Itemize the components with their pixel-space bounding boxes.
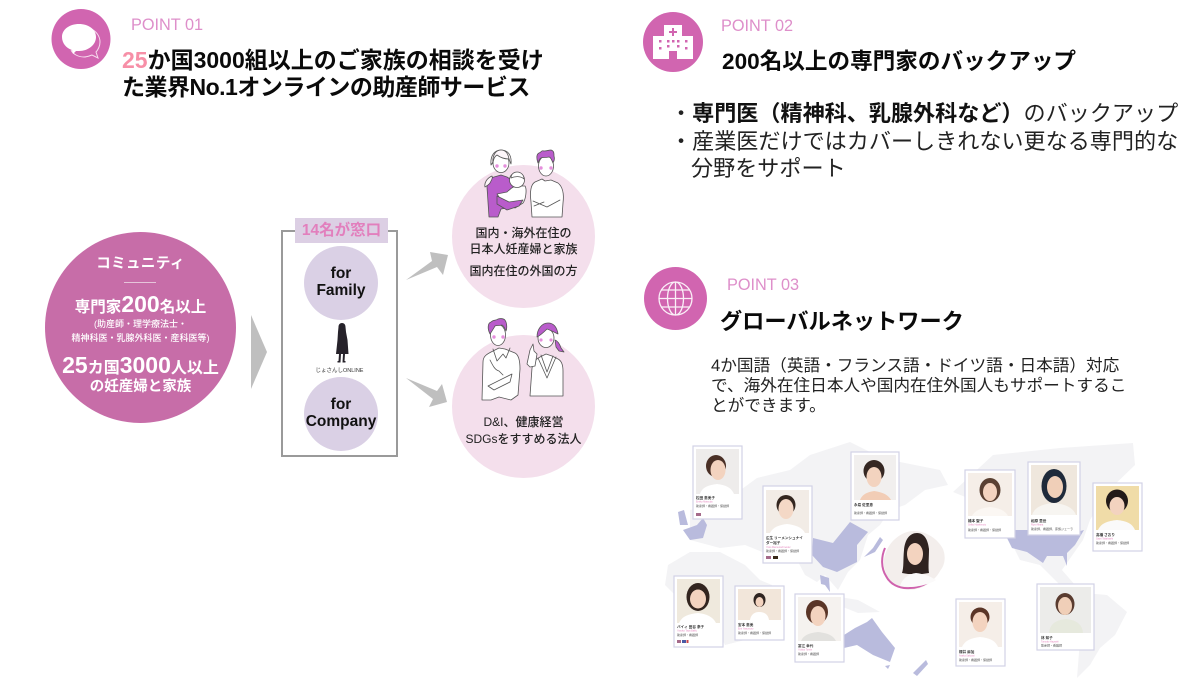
expert card 6: Yukiyo Tomie — [798, 648, 813, 652]
text: community heading: コミュニティ — [96, 256, 185, 272]
circle: for family — [304, 246, 378, 320]
label: point 01: POINT 01 — [131, 16, 203, 34]
expert card 10: 助産師・看護師 — [1041, 642, 1062, 648]
text: logo: じょさんしONLINE — [316, 368, 363, 374]
expert card 10: Tomoko Hayashi — [1041, 640, 1059, 644]
expert card 9: 高橋 さおり — [1096, 532, 1115, 537]
expert card 3 — [851, 452, 899, 520]
label: 14 contacts: 14名が窓口 — [302, 222, 381, 239]
text: family targets — [469, 226, 578, 256]
expert card 11: Asaka Sakurai — [959, 654, 975, 658]
text: company targets: SDGsをすすめる法人 — [465, 432, 582, 446]
text: family targets: 国内・海外在住の — [475, 226, 572, 240]
text: company targets — [465, 414, 582, 446]
text: families: 25カ国3000人以上 — [62, 352, 219, 378]
expert card 1: 松田 恵美子 — [696, 495, 715, 500]
map: highlighted countries — [678, 510, 1084, 676]
expert card 2 — [763, 486, 812, 563]
text: specialist types: 精神科医・乳腺外科医・産科医等) — [72, 333, 210, 343]
expert card 11: 助産師・看護師・保健師 — [959, 657, 992, 662]
text: bullet list: ・産業医だけではカバーしきれない更なる専門的な — [670, 128, 1178, 154]
expert card 4: 助産師・看護師 — [677, 632, 698, 637]
circle: for company: for — [331, 396, 351, 413]
illustration: business people — [482, 318, 564, 400]
circle: for family: Family — [316, 282, 366, 298]
circle: for company: Company — [306, 412, 376, 430]
panel: point 02 — [643, 12, 1178, 180]
expert card 8 — [1028, 462, 1080, 535]
expert card 9: Saori Takahashi — [1096, 538, 1113, 540]
icon: globe — [644, 267, 707, 330]
text: bullet list — [670, 100, 1178, 180]
expert card 10: 林 知子 — [1041, 635, 1053, 640]
text: language support — [711, 356, 1126, 414]
expert card 8: 助産師、看護師、家族ジェーラ — [1031, 526, 1073, 531]
expert card 2: 助産師・看護師・保健師 — [766, 548, 799, 553]
icon: midwife silhouette — [336, 323, 348, 362]
expert card 5: 助産師・看護師・保健師 — [738, 630, 771, 635]
expert card 10 — [1037, 584, 1094, 650]
expert card 7 — [965, 470, 1015, 538]
expert card 2: Yuko Riemenschneider — [766, 546, 791, 549]
text: bullet list: ・専門医（精神科、乳腺外科など）のバックアップ — [670, 100, 1178, 126]
expert card 1: 助産師・看護師・保健師 — [696, 503, 729, 508]
circle: families — [452, 165, 595, 308]
expert card 3: 永易 佐里恵 — [854, 502, 873, 507]
icon: hospital — [643, 12, 703, 72]
expert card 7: 助産師・看護師・保健師 — [968, 527, 1001, 532]
text: specialists: 専門家200名以上 — [75, 291, 206, 317]
text: language support: とができます。 — [711, 396, 826, 414]
text: bullet list: 分野をサポート — [691, 156, 846, 180]
circle: community — [45, 232, 236, 423]
text: family targets: 日本人妊産婦と家族 — [469, 242, 578, 256]
expert card 8: 相原 里世 — [1031, 518, 1047, 523]
circle: for family: for — [331, 265, 351, 282]
expert card 11 — [956, 599, 1005, 666]
label: point 03: POINT 03 — [727, 276, 799, 294]
panel: point 01 — [45, 9, 595, 478]
text: specialist types: (助産師・理学療法士・ — [94, 319, 187, 329]
box: contact points — [281, 230, 398, 457]
expert card 5 — [735, 586, 784, 640]
icon: speech bubbles — [52, 9, 110, 69]
expert card 5: Emi Yasumoto — [738, 628, 754, 630]
map: land — [665, 442, 1135, 678]
expert card 4: Yasuko Taya Bailly — [677, 630, 698, 632]
expert card 9 — [1093, 483, 1142, 551]
expert card 3: 助産師・看護師・保健師 — [854, 510, 887, 515]
center portrait — [882, 531, 945, 590]
heading: point 02: 200名以上の専門家のバックアップ — [722, 49, 1076, 74]
text: language support: で、海外在住日本人や国内在住外国人もサポートするこ — [711, 376, 1126, 394]
panel: point 03 — [644, 267, 1126, 414]
world map with experts — [665, 442, 1143, 678]
heading: point 01: た業界No.1オンラインの助産師サービス — [122, 74, 530, 100]
text: families line 2: の妊産婦と家族 — [90, 379, 191, 395]
heading: point 01: 25か国3000組以上のご家族の相談を受け — [122, 47, 544, 73]
text: language support: 4か国語（英語・フランス語・ドイツ語・日本語）対応 — [711, 356, 1119, 374]
divider line — [124, 282, 156, 283]
expert card 2: ダー裕子 — [766, 540, 781, 545]
illustration: family — [484, 150, 564, 218]
expert card 4 — [674, 576, 723, 647]
expert card 6 — [795, 594, 844, 662]
arrow: community to contact — [251, 315, 267, 389]
label: 14 contacts — [295, 218, 388, 243]
expert card 6: 助産師・看護師 — [798, 651, 819, 656]
expert card 6: 冨江 幸代 — [798, 643, 814, 648]
text: specialist types — [72, 319, 210, 343]
expert card 1: Emiko Matsuda — [696, 500, 713, 504]
arrow: to companies — [406, 378, 447, 407]
expert card 1 — [693, 446, 742, 519]
circle: companies — [452, 335, 595, 478]
expert card 7: Seiko Hashimoto — [968, 524, 987, 526]
heading: point 03: グローバルネットワーク — [720, 309, 964, 334]
expert card 2: 広生 リーメンシュナイ — [766, 535, 803, 540]
arrow: to families — [406, 252, 448, 280]
text: company targets: D&I、健康経営 — [483, 414, 564, 428]
expert card 8: Riyo Aihara — [1031, 524, 1044, 526]
expert card 7: 橋本 聖子 — [968, 518, 984, 523]
expert card 11: 櫻井 麻加 — [959, 649, 975, 654]
label: point 02: POINT 02 — [721, 17, 793, 35]
circle: for company — [304, 377, 378, 451]
expert card 4: バイィ 田谷 泰子 — [677, 624, 705, 629]
text: foreign residents: 国内在住の外国の方 — [469, 264, 578, 278]
heading: point 01 — [122, 47, 544, 100]
expert card 9: 助産師・看護師・保健師 — [1096, 540, 1129, 545]
expert card 5: 安本 恵美 — [738, 622, 754, 627]
